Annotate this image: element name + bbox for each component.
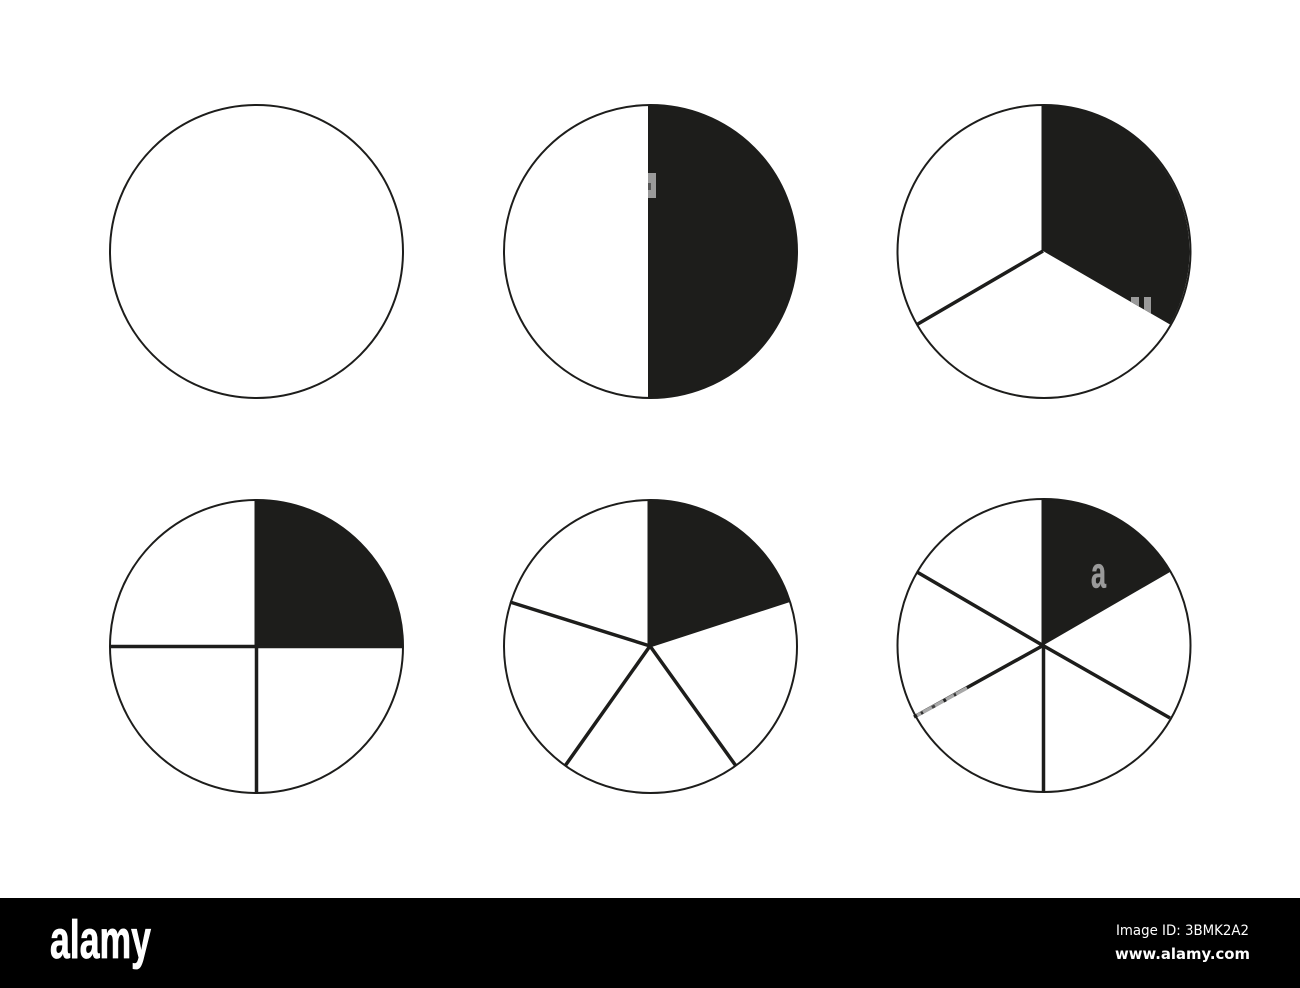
pie: one third filled — [898, 105, 1190, 398]
pie: one sixth filled — [898, 499, 1190, 792]
image id: Image ID: 3BMK2A2 — [1116, 923, 1249, 939]
footer bar — [0, 898, 1300, 988]
website url: www.alamy.com — [1115, 945, 1250, 963]
pie: one fifth filled — [504, 500, 797, 793]
pie: one sixth filled: a — [1091, 548, 1106, 598]
footer brand name: alamy — [50, 910, 151, 970]
pie: one quarter filled — [110, 500, 403, 793]
pie: one half filled — [504, 105, 797, 398]
pie: whole circle — [110, 105, 403, 398]
